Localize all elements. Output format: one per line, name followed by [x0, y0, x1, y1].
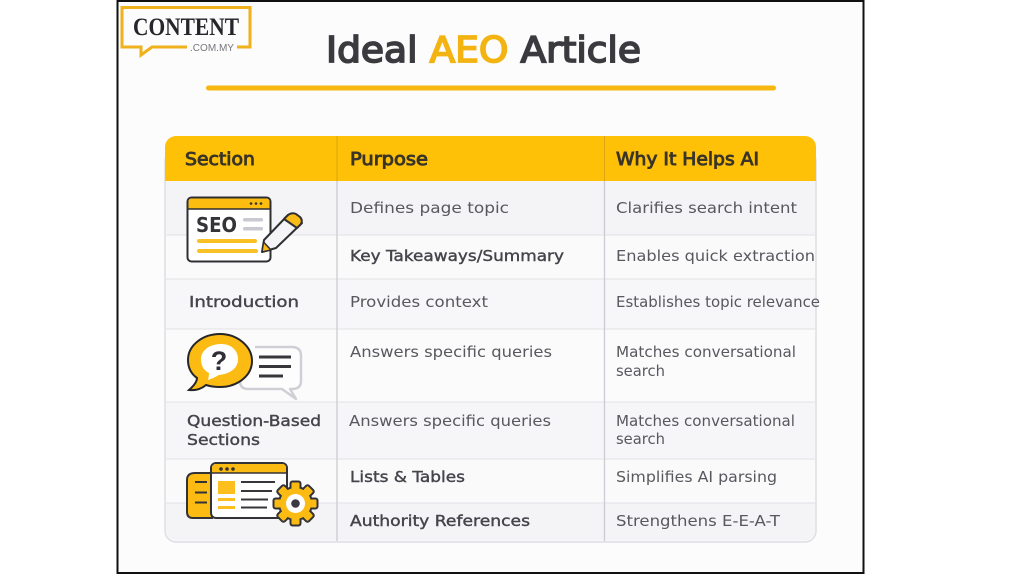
title underline: [206, 86, 776, 90]
icon: question and answer chat bubbles: [188, 334, 301, 399]
row: lists and tables: Simplifies AI parsing: [616, 468, 777, 486]
row: question-based sections: Question-Based: [187, 412, 321, 430]
row: question-based sections: Sections: [187, 431, 260, 449]
logo: content.com.my: [122, 8, 250, 55]
row: page topic: [350, 199, 797, 217]
row: authority references: [350, 512, 781, 530]
logo: content.com.my: .COM.MY: [190, 43, 234, 54]
row: question-based sections: Matches conversational: [616, 412, 795, 430]
row: lists and tables: Lists & Tables: [350, 468, 465, 486]
row: key takeaways: [350, 247, 815, 265]
row: introduction: Establishes topic relevance: [616, 293, 820, 311]
row: specific queries: Matches conversational: [616, 343, 796, 361]
title: Ideal AEO Article: [326, 30, 641, 71]
icon: SEO page and pencil: SEO: [196, 213, 237, 237]
row: question-based sections: [187, 412, 795, 449]
row: introduction: Introduction: [189, 293, 299, 311]
table header: Why It Helps AI: [616, 150, 759, 170]
row: page topic: Clarifies search intent: [616, 199, 797, 217]
row: introduction: [189, 293, 820, 311]
row: authority references: Authority References: [350, 512, 530, 530]
icon: question and answer chat bubbles: ?: [211, 346, 227, 376]
table header: Section: [185, 150, 255, 170]
row: page topic: Defines page topic: [350, 199, 509, 217]
icon: SEO page and pencil: [188, 198, 302, 262]
row: specific queries: search: [616, 362, 665, 380]
table header: Purpose: [350, 150, 428, 170]
row: authority references: Strengthens E-E-A-T: [616, 512, 781, 530]
table: [165, 136, 820, 542]
row: introduction: Provides context: [350, 293, 488, 311]
row: question-based sections: search: [616, 430, 665, 448]
row: key takeaways: Enables quick extraction: [616, 247, 815, 265]
table body: [165, 150, 816, 542]
row: specific queries: Answers specific queries: [350, 343, 552, 361]
row: key takeaways: Key Takeaways/Summary: [350, 247, 564, 265]
icon: web layout and gear: [187, 463, 318, 526]
table header: [165, 136, 816, 181]
slide frame: [118, 1, 864, 573]
row: lists and tables: [350, 468, 777, 486]
row: specific queries: [350, 343, 796, 380]
logo: content.com.my: CONTENT: [133, 14, 239, 41]
row: question-based sections: Answers specific queries: [349, 412, 551, 430]
